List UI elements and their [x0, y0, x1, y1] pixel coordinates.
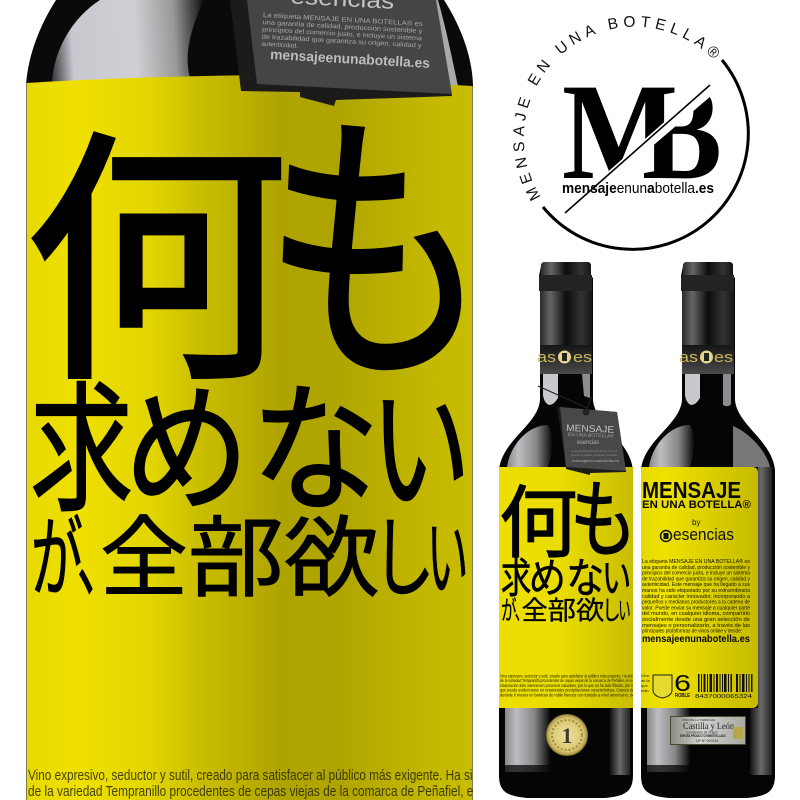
front small print: que puede evidenciarse en ocasionales precipitaciones características. Crianza de	[500, 688, 635, 693]
round brand logo	[513, 16, 750, 251]
hanging tag	[230, 0, 452, 106]
neck band brand: es	[714, 349, 733, 366]
mini tag: mensajeenunabotella.es	[572, 458, 619, 463]
neck band	[682, 345, 734, 374]
gold medal: 1	[562, 723, 572, 748]
slogan line 2: な	[251, 373, 379, 529]
slogan line 1: 何	[24, 117, 289, 413]
label body text: una garantía de calidad, producción sostenible y	[642, 565, 750, 571]
capsule top	[541, 262, 591, 275]
tag body: La etiqueta MENSAJE EN UNA BOTELLA® es una	[571, 449, 617, 453]
back bottle	[641, 262, 775, 798]
mini tag: garantía de calidad, producción sostenible	[571, 453, 617, 457]
slogan line 2: い	[371, 372, 470, 529]
yellow back label	[641, 467, 758, 708]
neck band brand: es	[573, 349, 592, 366]
monogram M: M	[562, 55, 678, 208]
neck shading	[682, 291, 734, 374]
neck band brand: as	[537, 349, 556, 366]
tag back edge	[230, 0, 452, 106]
barcode: 8437000065324	[695, 694, 752, 700]
mini slogan: が	[501, 596, 517, 625]
mini slogan: 何	[499, 479, 578, 567]
six months mark: 6	[674, 670, 691, 696]
text guide path	[524, 27, 716, 197]
slogan line 3: 全	[100, 509, 188, 608]
neck band	[540, 345, 592, 374]
label small print	[28, 769, 473, 799]
Castilla y Leon back label: UP Nº 900245	[696, 739, 718, 743]
mini slogan: 欲	[576, 595, 604, 625]
Castilla y Leon back label: ESPAÑA PRODUCTO EMBOTELLADO	[680, 733, 726, 738]
mini slogan: 部	[548, 595, 576, 625]
back small print	[641, 674, 650, 692]
shoulder highlights	[649, 425, 694, 467]
slogan line 1	[24, 95, 489, 416]
lower glass highlights	[647, 708, 690, 772]
slogan line 2	[30, 372, 470, 530]
capsule collar	[539, 275, 592, 291]
slogan line 3: し	[372, 511, 435, 609]
label body text: del mundo, en cualquier idioma, compartirlo	[642, 611, 750, 617]
glass highlight	[52, 0, 204, 82]
yellow label	[499, 467, 633, 708]
monogram B: B	[642, 55, 722, 208]
label heading: MENSAJE	[642, 477, 741, 503]
label body text: autenticidad. Este mensaje que ha llegado a sus	[642, 582, 750, 588]
label heading: EN UNA BOTELLA®	[642, 499, 751, 511]
mini slogan	[499, 474, 637, 626]
neck shading	[540, 291, 592, 374]
tag text: La etiqueta MENSAJE EN UNA BOTELLA® es	[263, 11, 424, 28]
by esencias	[660, 518, 734, 544]
tag website: mensajeenunabotella.es	[270, 46, 431, 71]
label body text: socialmente desde una gran selección de	[642, 617, 750, 623]
slogan line 3: 部	[188, 510, 284, 608]
front small print: de la variedad Tempranillo procedentes de cepas viejas de la comarca de Peñafiel, en su	[500, 678, 635, 683]
neck band brand	[537, 349, 592, 366]
slogan line 3: 欲	[284, 510, 379, 608]
logo website: mensajeenunabotella.es	[562, 181, 714, 197]
mini slogan: 全	[522, 595, 548, 625]
front small print: Vino expresivo, seductor y sutil, creado para satisfacer al público más exigente. Ha sido	[500, 674, 635, 678]
label body text	[642, 558, 750, 635]
large slogan	[24, 95, 489, 609]
tag text	[261, 11, 424, 57]
label body text: mensajes o personalizarlo, a través de las	[642, 623, 750, 629]
label body text: La etiqueta MENSAJE EN UNA BOTELLA® es	[642, 558, 750, 565]
mini slogan: い	[618, 598, 631, 626]
label website: mensajeenunabotella.es	[642, 634, 750, 645]
by esencias: esencias	[673, 525, 734, 544]
slogan line 2: め	[124, 374, 249, 530]
Castilla y Leon back label: VINO DE LA TIERRA DE	[682, 718, 715, 722]
slogan line 3: が	[31, 511, 83, 608]
Castilla y Leon back label: Castilla y León	[683, 722, 734, 732]
mini slogan: い	[602, 555, 631, 602]
barcode	[695, 674, 752, 700]
diagonal line	[565, 85, 710, 213]
lower glass highlight	[505, 708, 550, 772]
label small print: de la variedad Tempranillo procedentes de cepas viejas de la comarca de Peñafiel, en	[28, 784, 480, 800]
curved brand name: MENSAJE EN UNA BOTELLA®	[513, 16, 719, 202]
gold medal	[546, 714, 588, 756]
logo circle arc	[543, 60, 748, 249]
capsule top	[683, 262, 733, 275]
tag title: MENSAJE	[566, 423, 614, 436]
back small print: que	[641, 683, 648, 688]
back small print: de la	[641, 678, 650, 683]
neck band brand	[679, 349, 733, 366]
Castilla y Leon back label: Complexión de Origen	[686, 730, 718, 734]
hang string	[538, 386, 592, 408]
large bottle glass	[26, 0, 473, 800]
six months mark	[674, 670, 691, 699]
front small print	[500, 674, 635, 697]
mini slogan: 求	[501, 555, 531, 602]
mini tag: esencias	[577, 440, 599, 446]
label small print: Vino expresivo, seductor y sutil, creado para satisfacer al público más exigente. Ha sido el	[28, 768, 498, 784]
six months mark: ROBLE	[675, 693, 690, 699]
back small print: elab	[641, 688, 649, 693]
label body text: principales plataformas de vinos online y desde:	[642, 629, 742, 635]
tag shape	[557, 407, 626, 475]
capsule collar	[681, 275, 734, 291]
mini slogan: し	[602, 596, 621, 625]
label body text: de trazabilidad que garantiza su origen, calidad y	[642, 576, 750, 582]
neck band brand: as	[679, 349, 698, 366]
slogan line 3: 、	[77, 510, 122, 608]
yellow label	[26, 75, 473, 800]
neck highlight	[685, 374, 700, 405]
bottle body	[499, 262, 633, 798]
mini tag: EN UNA BOTELLA®	[568, 431, 614, 440]
bottle body	[641, 262, 775, 798]
mini slogan: め	[529, 556, 566, 602]
right glass highlight	[436, 0, 458, 86]
back small print: Vino	[641, 673, 650, 678]
tag text: principios del comercio justo, e incluye un sistema	[262, 26, 423, 42]
shoulder highlight	[507, 425, 552, 467]
label body text: manos ha sido etiquetado por su extraordinaria	[642, 588, 750, 594]
slogan line 1: も	[263, 95, 489, 416]
slogan line 3	[31, 509, 468, 609]
label body text: valor. Puede enviar su mensaje a cualquier parte	[642, 605, 750, 611]
tag text: de trazabilidad que garantiza su origen, calidad y	[262, 34, 423, 50]
label body text: principios del comercio justo, e incluye un sistema	[642, 571, 750, 577]
shield badge	[653, 675, 672, 698]
Castilla y Leon back label	[670, 716, 746, 744]
neck highlight	[543, 374, 558, 405]
large bottle close-up	[24, 0, 498, 800]
slogan line 2: 求	[30, 374, 133, 530]
mini tag	[557, 407, 626, 475]
mini slogan: な	[566, 556, 604, 602]
front small print: durante 6 meses en barricas de roble francés con tostado a nivel americano, de	[500, 692, 635, 697]
mini slogan: も	[570, 474, 637, 569]
tag face	[247, 0, 452, 94]
label body text: pequeños y medianos productores a la cadena de	[642, 600, 750, 606]
front small print: elaboración sólo intervienen procesos naturales, por lo que no ha sido filtrado, por lo	[500, 683, 635, 688]
slogan line 3: い	[427, 510, 468, 608]
mini slogan: 、	[515, 597, 528, 626]
tag text: una garantía de calidad, producción sostenible y	[262, 19, 423, 35]
front bottle	[499, 262, 637, 798]
tag text: autenticidad.	[261, 41, 299, 50]
by esencias: by	[692, 518, 700, 527]
label body text: calidad y carácter innovador, incorporando a	[642, 594, 750, 600]
label edge lines	[26, 83, 472, 800]
